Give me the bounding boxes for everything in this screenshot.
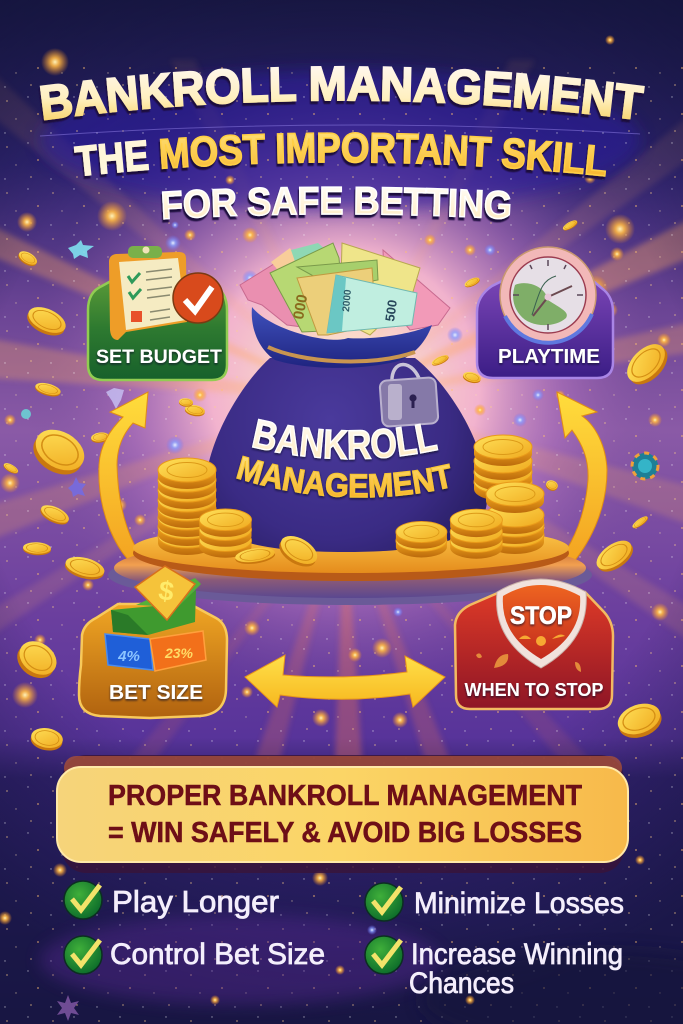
panel: set budget: [88, 246, 227, 380]
icon: clipboard: [109, 246, 187, 340]
icon: poker chip: [632, 453, 658, 479]
benefit: play longer: Play Longer: [112, 884, 279, 919]
rope: [268, 347, 415, 361]
icon: padlock: [379, 364, 439, 427]
platform: [108, 523, 592, 605]
title: [38, 66, 645, 224]
money bills: 2000: [341, 289, 354, 312]
title line 2: THE MOST IMPORTANT SKILL: [72, 132, 606, 180]
benefit: minimize losses: [365, 883, 624, 921]
icon: stop shield: STOP: [510, 602, 572, 630]
panel: summary banner: [57, 755, 628, 873]
icon: gold dollar diamond: [135, 566, 195, 620]
icon: check: [64, 881, 102, 919]
money bills: 500: [382, 299, 400, 322]
icon: red check: [173, 273, 223, 323]
benefit: minimize losses: Minimize Losses: [414, 887, 624, 920]
icon: stop shield: [476, 579, 586, 672]
panel: bet size: [79, 566, 227, 718]
money bills: 000: [290, 293, 311, 321]
arrow: left curved up: [99, 392, 155, 572]
floating gold coins: [2, 218, 674, 753]
title line 1: BANKROLL MANAGEMENT: [38, 66, 645, 124]
icon: green blocks: [111, 578, 201, 635]
arrow: double headed: [245, 655, 445, 707]
icon: orange block: 23%: [164, 645, 194, 661]
arrow: right curved up: [550, 392, 607, 572]
benefit: increase winning chances: [365, 936, 623, 1000]
label: when to stop: WHEN TO STOP: [464, 680, 604, 700]
bag label: BANKROLL: [250, 418, 440, 462]
label: set budget: SET BUDGET: [96, 346, 222, 368]
panel: when to stop: [455, 579, 613, 709]
bag label: [235, 418, 452, 501]
title line 3: FOR SAFE BETTING: [160, 186, 511, 224]
panel: playtime: [477, 247, 613, 378]
icon: blue block: [105, 634, 153, 670]
benefit: increase winning chances: Chances: [409, 967, 514, 1000]
money bag: [209, 307, 487, 552]
bag label: MANAGEMENT: [235, 456, 452, 501]
icon: gold dollar diamond: $: [157, 575, 176, 607]
icon: clock: [500, 247, 596, 343]
icon: check: [365, 936, 403, 974]
banner line 1: PROPER BANKROLL MANAGEMENT: [108, 780, 583, 812]
label: playtime: PLAYTIME: [498, 346, 600, 368]
icon: check: [365, 883, 403, 921]
benefit: increase winning chances: Increase Winning: [411, 938, 623, 971]
icon: blue block: 4%: [117, 648, 140, 665]
money bills: [240, 243, 450, 335]
label: bet size: BET SIZE: [109, 682, 203, 704]
banner line 2: = WIN SAFELY & AVOID BIG LOSSES: [108, 817, 582, 849]
icon: orange block: [150, 631, 206, 671]
coin stacks: [158, 435, 544, 572]
icon: check: [64, 936, 102, 974]
benefit: control bet size: Control Bet Size: [110, 938, 325, 971]
